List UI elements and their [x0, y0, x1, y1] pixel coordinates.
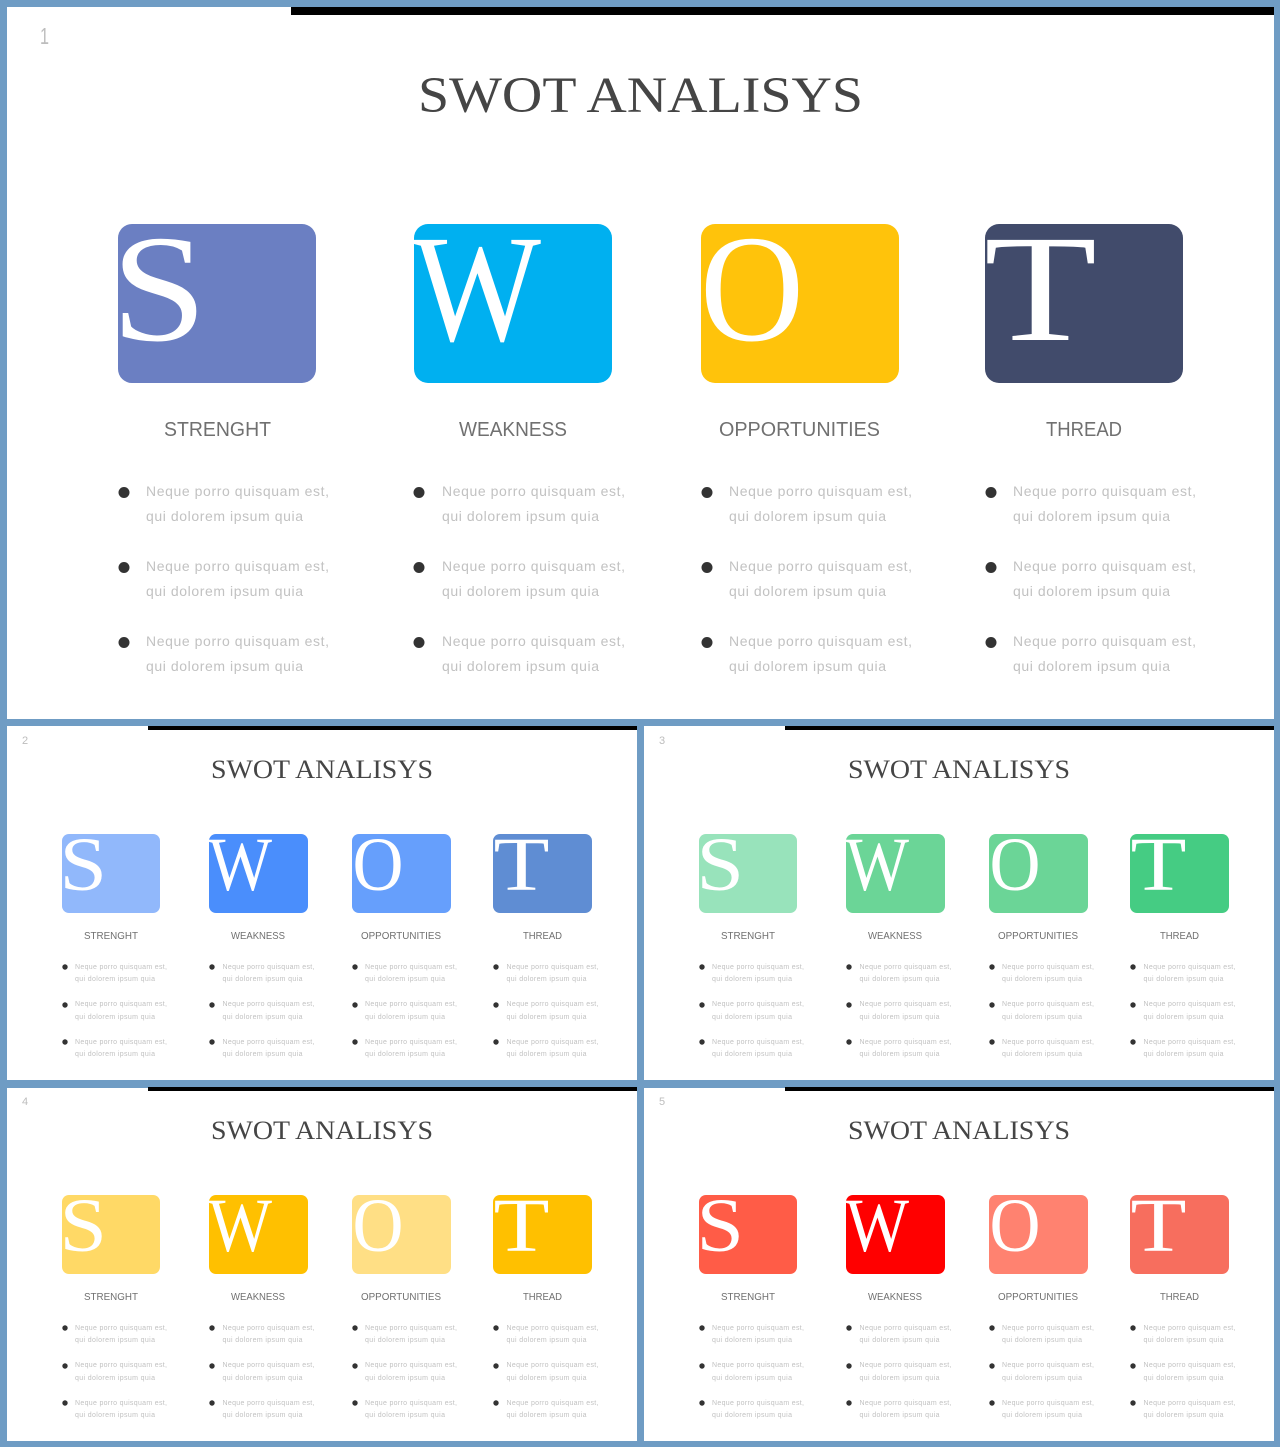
column: weakness: W [846, 823, 909, 907]
column: weakness: WEAKNESS [868, 930, 922, 942]
column: strength: STRENGHT [84, 1291, 139, 1303]
column: threat: Neque porro quisquam est, [506, 1362, 599, 1369]
column: opportunities: qui dolorem ipsum quia [1002, 1412, 1082, 1419]
column: opportunities: Neque porro quisquam est, [365, 1325, 457, 1332]
column: threat: THREAD [523, 1291, 562, 1303]
column: threat [493, 823, 599, 1058]
column: opportunities [352, 1184, 457, 1419]
column: strength: Neque porro quisquam est, [712, 1039, 804, 1046]
column: opportunities: O [352, 1184, 404, 1268]
column: strength: qui dolorem ipsum quia [712, 1051, 792, 1058]
column: opportunities: Neque porro quisquam est, [365, 1001, 457, 1008]
column: threat [493, 1184, 599, 1419]
column: weakness: qui dolorem ipsum quia [860, 1375, 940, 1382]
column: strength: STRENGHT [721, 930, 776, 942]
column: opportunities: OPPORTUNITIES [998, 930, 1078, 942]
column: threat: T [1130, 1184, 1186, 1268]
column: opportunities: qui dolorem ipsum quia [365, 1014, 445, 1021]
column: strength: STRENGHT [164, 419, 271, 441]
column: weakness: qui dolorem ipsum quia [222, 1412, 303, 1419]
column: opportunities: qui dolorem ipsum quia [365, 1051, 445, 1058]
column: strength: Neque porro quisquam est, [75, 1400, 167, 1407]
column: weakness: Neque porro quisquam est, [860, 964, 952, 971]
panel: slide 4 yellow [7, 1087, 637, 1441]
title: SWOT ANALISYS [848, 755, 1070, 784]
column: opportunities: O [352, 823, 404, 907]
column: strength [60, 823, 167, 1058]
column: opportunities: qui dolorem ipsum quia [1002, 1375, 1082, 1382]
column: threat: Neque porro quisquam est, [1144, 1400, 1236, 1407]
column: opportunities: Neque porro quisquam est, [365, 1039, 457, 1046]
column: weakness: qui dolorem ipsum quia [222, 1375, 303, 1382]
column: opportunities: qui dolorem ipsum quia [729, 658, 886, 674]
column: weakness: Neque porro quisquam est, [860, 1362, 952, 1369]
column: weakness: WEAKNESS [231, 930, 285, 942]
column: strength: Neque porro quisquam est, [712, 964, 804, 971]
column: strength [60, 1184, 167, 1419]
column: threat: Neque porro quisquam est, [1144, 1039, 1236, 1046]
column: strength: qui dolorem ipsum quia [146, 658, 303, 674]
column: opportunities: Neque porro quisquam est, [365, 1400, 457, 1407]
column: strength: qui dolorem ipsum quia [75, 1337, 155, 1344]
column: threat: THREAD [1160, 930, 1199, 942]
column: threat: Neque porro quisquam est, [506, 1001, 599, 1008]
column: strength: Neque porro quisquam est, [146, 633, 329, 649]
column: opportunities: OPPORTUNITIES [719, 419, 880, 441]
column: strength: S [696, 1184, 744, 1268]
column: weakness: qui dolorem ipsum quia [442, 508, 599, 524]
column: threat: T [494, 1184, 550, 1268]
column: strength: qui dolorem ipsum quia [75, 1412, 155, 1419]
column: threat: Neque porro quisquam est, [1013, 633, 1196, 649]
column: threat: qui dolorem ipsum quia [506, 1014, 587, 1021]
column: threat: Neque porro quisquam est, [1144, 1325, 1236, 1332]
column: threat: THREAD [523, 930, 562, 942]
column: strength [696, 823, 804, 1058]
column: strength: qui dolorem ipsum quia [712, 1412, 792, 1419]
column: strength: S [60, 823, 107, 907]
column: weakness: WEAKNESS [231, 1291, 285, 1303]
column: strength: Neque porro quisquam est, [146, 558, 329, 574]
column: weakness [846, 823, 952, 1058]
slide number 1: 1 [40, 23, 49, 49]
column: threat: qui dolorem ipsum quia [1144, 1014, 1224, 1021]
column: strength: Neque porro quisquam est, [75, 1362, 167, 1369]
column: threat: qui dolorem ipsum quia [506, 1337, 587, 1344]
title: SWOT ANALISYS [848, 1116, 1070, 1145]
column: opportunities [352, 823, 457, 1058]
panel: slide 3 green [644, 726, 1274, 1080]
column: threat: qui dolorem ipsum quia [506, 976, 587, 983]
column: threat: THREAD [1160, 1291, 1199, 1303]
column: opportunities: qui dolorem ipsum quia [365, 1412, 445, 1419]
column: weakness: qui dolorem ipsum quia [222, 1337, 303, 1344]
column: weakness: W [846, 1184, 909, 1268]
column: opportunities: O [990, 1184, 1040, 1268]
column: opportunities: Neque porro quisquam est, [1002, 964, 1094, 971]
column: opportunities: qui dolorem ipsum quia [365, 1337, 445, 1344]
column: opportunities [989, 1184, 1094, 1419]
column: strength: S [111, 205, 207, 374]
column: threat: Neque porro quisquam est, [1013, 483, 1196, 499]
column: weakness [208, 1184, 315, 1419]
column: opportunities: Neque porro quisquam est, [365, 1362, 457, 1369]
slide number 4: 4 [22, 1096, 28, 1108]
column: strength: Neque porro quisquam est, [146, 483, 329, 499]
column: opportunities: Neque porro quisquam est, [1002, 1362, 1094, 1369]
slide number 5: 5 [659, 1096, 665, 1108]
column: threat: THREAD [1046, 419, 1122, 441]
column: weakness: qui dolorem ipsum quia [860, 1014, 940, 1021]
column: opportunities: qui dolorem ipsum quia [1002, 1337, 1082, 1344]
column: opportunities: Neque porro quisquam est, [729, 483, 912, 499]
column: opportunities: Neque porro quisquam est, [1002, 1039, 1094, 1046]
column: threat: Neque porro quisquam est, [506, 1325, 599, 1332]
column: weakness: Neque porro quisquam est, [860, 1001, 952, 1008]
column: strength: qui dolorem ipsum quia [712, 976, 792, 983]
column: strength: qui dolorem ipsum quia [75, 1014, 155, 1021]
column: strength [696, 1184, 804, 1419]
panel: slide 2 blue [7, 726, 637, 1080]
column: opportunities: OPPORTUNITIES [361, 1291, 441, 1303]
column: opportunities: OPPORTUNITIES [361, 930, 441, 942]
column: opportunities: Neque porro quisquam est, [1002, 1001, 1094, 1008]
column: weakness [846, 1184, 952, 1419]
column: opportunities [989, 823, 1094, 1058]
column: threat: Neque porro quisquam est, [1144, 1362, 1236, 1369]
column: strength: Neque porro quisquam est, [75, 1001, 167, 1008]
column: weakness: qui dolorem ipsum quia [442, 658, 599, 674]
column: threat: T [1130, 823, 1186, 907]
column: opportunities: Neque porro quisquam est, [729, 633, 912, 649]
column: threat: qui dolorem ipsum quia [1144, 1375, 1224, 1382]
column: threat: qui dolorem ipsum quia [1013, 508, 1170, 524]
column: threat: qui dolorem ipsum quia [1013, 658, 1170, 674]
column: threat: T [984, 205, 1097, 374]
column: weakness: W [208, 823, 272, 907]
column: threat: Neque porro quisquam est, [1013, 558, 1196, 574]
column: weakness: Neque porro quisquam est, [222, 1400, 315, 1407]
column: strength: qui dolorem ipsum quia [712, 1014, 792, 1021]
column: opportunities: qui dolorem ipsum quia [1002, 976, 1082, 983]
column: threat [1130, 823, 1236, 1058]
column: weakness: Neque porro quisquam est, [860, 1039, 952, 1046]
column: strength: qui dolorem ipsum quia [75, 1375, 155, 1382]
column: opportunities: qui dolorem ipsum quia [729, 583, 886, 599]
column: weakness: qui dolorem ipsum quia [222, 1051, 303, 1058]
column: threat: qui dolorem ipsum quia [1144, 1337, 1224, 1344]
column: weakness: qui dolorem ipsum quia [860, 1051, 940, 1058]
column: weakness: qui dolorem ipsum quia [222, 976, 303, 983]
column: threat: qui dolorem ipsum quia [1013, 583, 1170, 599]
column: threat: Neque porro quisquam est, [1144, 1001, 1236, 1008]
column: opportunities: Neque porro quisquam est, [729, 558, 912, 574]
column: threat: Neque porro quisquam est, [506, 1400, 599, 1407]
column: strength: STRENGHT [721, 1291, 776, 1303]
column: opportunities: Neque porro quisquam est, [365, 964, 457, 971]
column: strength: STRENGHT [84, 930, 139, 942]
column: threat: Neque porro quisquam est, [506, 964, 599, 971]
column: opportunities [700, 205, 912, 674]
column: weakness: Neque porro quisquam est, [860, 1325, 952, 1332]
column: opportunities: OPPORTUNITIES [998, 1291, 1078, 1303]
column: weakness: W [208, 1184, 272, 1268]
column: strength [111, 205, 329, 674]
column: threat: qui dolorem ipsum quia [1144, 976, 1224, 983]
column: weakness: Neque porro quisquam est, [222, 964, 315, 971]
column: opportunities: O [990, 823, 1040, 907]
column: strength: Neque porro quisquam est, [712, 1400, 804, 1407]
column: weakness: Neque porro quisquam est, [222, 1325, 315, 1332]
column: threat: qui dolorem ipsum quia [506, 1051, 587, 1058]
column: weakness: qui dolorem ipsum quia [860, 976, 940, 983]
column: weakness: Neque porro quisquam est, [442, 483, 625, 499]
column: strength: qui dolorem ipsum quia [146, 583, 303, 599]
column: threat: qui dolorem ipsum quia [1144, 1412, 1224, 1419]
column: strength: Neque porro quisquam est, [75, 1039, 167, 1046]
column: opportunities: qui dolorem ipsum quia [1002, 1051, 1082, 1058]
column: weakness: Neque porro quisquam est, [860, 1400, 952, 1407]
panel: slide 1 main SWOT [7, 7, 1274, 719]
title: SWOT ANALISYS [211, 1116, 433, 1145]
column: strength: qui dolorem ipsum quia [712, 1337, 792, 1344]
column: strength: S [60, 1184, 107, 1268]
column: strength: qui dolorem ipsum quia [712, 1375, 792, 1382]
column: opportunities: qui dolorem ipsum quia [1002, 1014, 1082, 1021]
column: weakness [413, 205, 625, 674]
column: weakness: qui dolorem ipsum quia [860, 1412, 940, 1419]
column: weakness: qui dolorem ipsum quia [860, 1337, 940, 1344]
title: SWOT ANALISYS [418, 68, 863, 124]
slide number 3: 3 [659, 735, 665, 747]
column: strength: Neque porro quisquam est, [75, 1325, 167, 1332]
column: strength: Neque porro quisquam est, [712, 1001, 804, 1008]
column: threat: qui dolorem ipsum quia [506, 1412, 587, 1419]
title: SWOT ANALISYS [211, 755, 433, 784]
column: opportunities: qui dolorem ipsum quia [729, 508, 886, 524]
column: weakness: Neque porro quisquam est, [222, 1362, 315, 1369]
column: weakness: Neque porro quisquam est, [442, 558, 625, 574]
slide number 2: 2 [22, 735, 28, 747]
column: strength: qui dolorem ipsum quia [75, 976, 155, 983]
panel: slide 5 red [644, 1087, 1274, 1441]
column: threat: qui dolorem ipsum quia [1144, 1051, 1224, 1058]
column: opportunities: qui dolorem ipsum quia [365, 1375, 445, 1382]
column: weakness: qui dolorem ipsum quia [222, 1014, 303, 1021]
column: strength: Neque porro quisquam est, [75, 964, 167, 971]
column: threat: T [494, 823, 550, 907]
column: weakness: W [413, 205, 542, 374]
column: opportunities: O [700, 205, 804, 374]
column: threat [1130, 1184, 1236, 1419]
column: weakness: Neque porro quisquam est, [222, 1001, 315, 1008]
column: threat: Neque porro quisquam est, [506, 1039, 599, 1046]
column: opportunities: Neque porro quisquam est, [1002, 1400, 1094, 1407]
column: opportunities: Neque porro quisquam est, [1002, 1325, 1094, 1332]
column: weakness: WEAKNESS [868, 1291, 922, 1303]
column: weakness: WEAKNESS [459, 419, 567, 441]
column: strength: Neque porro quisquam est, [712, 1325, 804, 1332]
column: weakness: qui dolorem ipsum quia [442, 583, 599, 599]
column: weakness: Neque porro quisquam est, [222, 1039, 315, 1046]
column: weakness: Neque porro quisquam est, [442, 633, 625, 649]
column: threat: Neque porro quisquam est, [1144, 964, 1236, 971]
column: opportunities: qui dolorem ipsum quia [365, 976, 445, 983]
column: weakness [208, 823, 315, 1058]
column: strength: S [696, 823, 744, 907]
column: strength: qui dolorem ipsum quia [146, 508, 303, 524]
column: strength: qui dolorem ipsum quia [75, 1051, 155, 1058]
column: strength: Neque porro quisquam est, [712, 1362, 804, 1369]
column: threat [984, 205, 1196, 674]
column: threat: qui dolorem ipsum quia [506, 1375, 587, 1382]
